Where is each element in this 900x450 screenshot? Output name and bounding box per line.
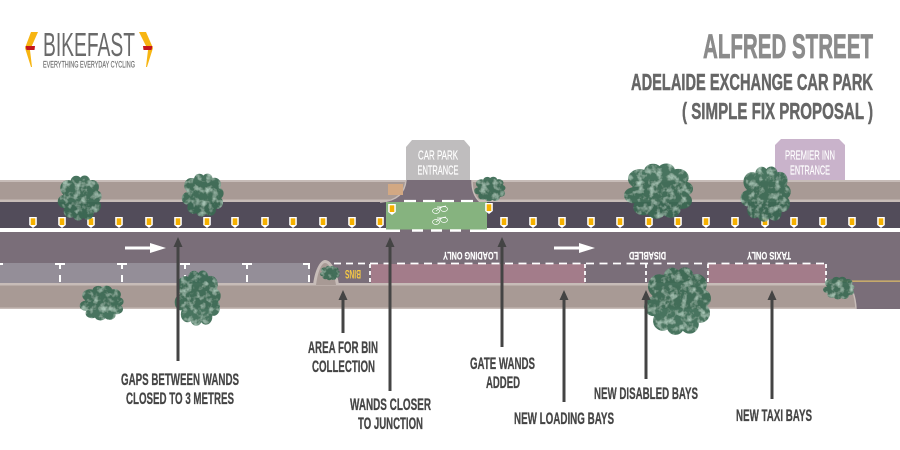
carriageway [0,232,900,263]
car park entrance: ENTRANCE [418,164,458,178]
direction arrow right [554,243,595,253]
label: wands closer to junction: WANDS CLOSER [350,395,431,414]
side road junction [838,280,900,309]
premier inn entrance [775,139,845,180]
label: gate wands added: ADDED [486,373,520,392]
title block [631,28,873,124]
premier inn entrance: PREMIER INN [785,148,835,162]
dashed bay markings [334,264,826,283]
label: gaps between wands [121,370,239,408]
premier inn entrance: ENTRANCE [790,164,830,178]
road layout [0,139,900,309]
label: area for bin collection: AREA FOR BIN [308,338,378,357]
trees [58,163,854,335]
cycle lane [0,202,900,228]
car park entrance: CAR PARK [418,148,458,162]
bin area recess: BINS [345,267,361,281]
road marking: disabled: DISABLED [629,249,666,261]
callout arrow: loading bays [560,290,568,402]
label: area for bin collection [308,338,378,376]
parking strip [0,263,900,283]
callout arrow: gaps between wands [174,237,182,361]
lower pavement [0,283,900,309]
callout arrow: bin collection [338,290,348,333]
callout arrow: taxi bays [768,290,776,399]
grey parking bays [0,263,310,283]
logo: BikeFast: BIKEFAST [43,27,135,64]
road marking: taxis only: TAXIS ONLY [747,249,791,261]
direction arrow left [125,243,166,253]
label: new taxi bays: NEW TAXI BAYS [736,406,812,425]
icon: cycle symbols [432,206,448,224]
label: gaps between wands: CLOSED TO 3 METRES [126,389,234,408]
label: new disabled bays: NEW DISABLED BAYS [594,384,698,403]
label: gate wands added [470,354,535,392]
logo: BikeFast: EVERYTHING EVERYDAY CYCLING [43,60,135,70]
label: area for bin collection: COLLECTION [312,357,375,376]
bin area recess [313,260,361,285]
taxi bay [708,264,826,283]
upper pavement [0,180,900,202]
loading bay [371,264,585,283]
T-shaped bay markings [0,263,310,282]
label: wands closer to junction: TO JUNCTION [358,414,423,433]
callout arrow: disabled bays [642,290,650,379]
car park entrance [380,140,480,232]
callout arrow: wands closer [386,237,394,391]
white separator line [0,228,900,232]
label: gaps between wands: GAPS BETWEEN WANDS [121,370,239,389]
label: gate wands added: GATE WANDS [470,354,535,373]
label: wands closer to junction [350,395,431,433]
logo: BikeFast [25,27,153,70]
label: new loading bays: NEW LOADING BAYS [514,409,614,428]
callout arrow: gate wands [498,237,506,347]
road marking: loading only: LOADING ONLY [443,249,498,261]
wands row [29,203,885,228]
green cycle crossing [386,201,487,230]
